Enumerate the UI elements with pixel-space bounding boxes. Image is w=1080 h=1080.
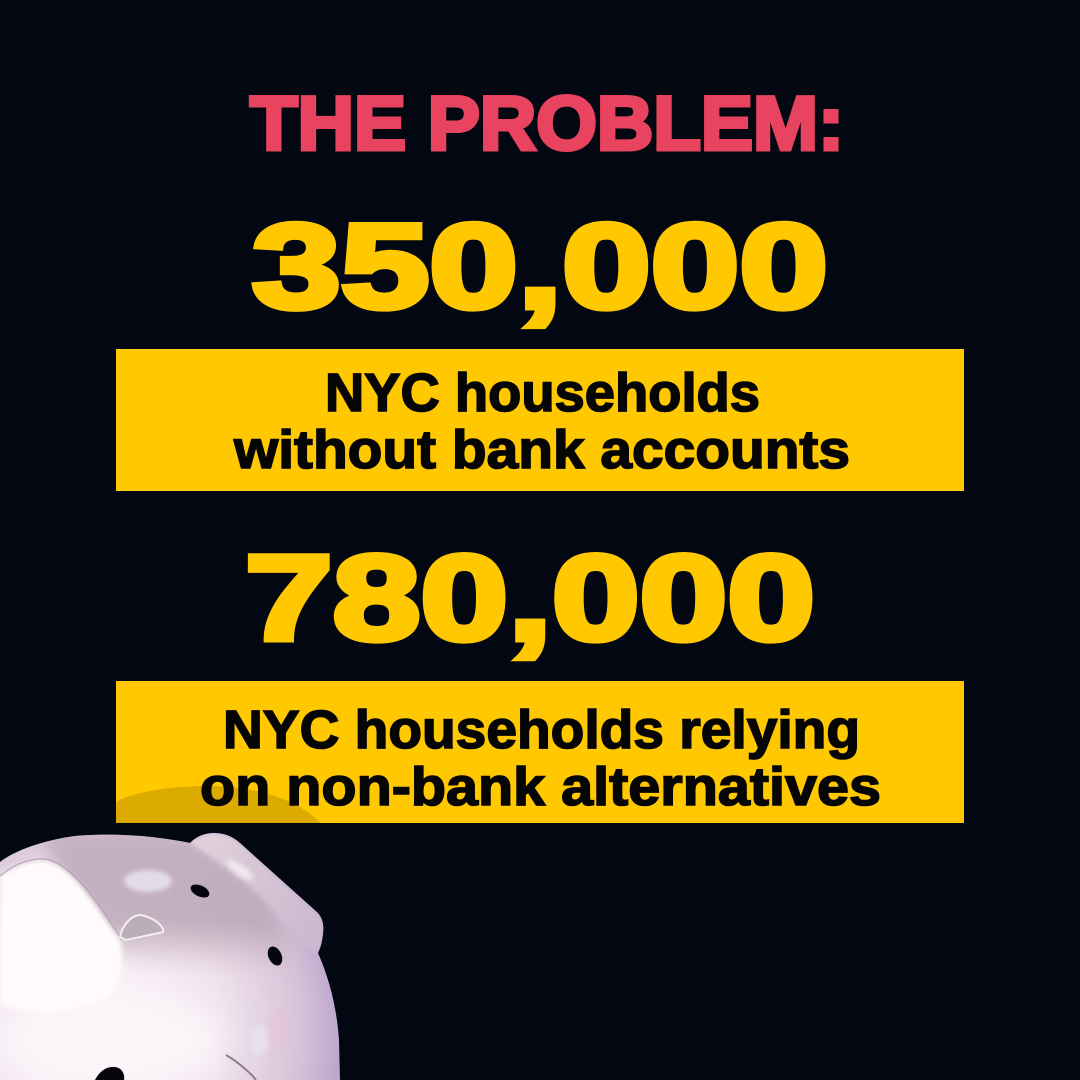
panel: households relying on non-bank alternatives: on non-bank alternatives <box>200 757 881 817</box>
statistic: 780,000: 780,000 <box>245 530 815 666</box>
icon: piggy bank photo <box>0 830 345 1080</box>
panel: households relying on non-bank alternatives <box>116 681 964 823</box>
panel: households without bank accounts: without bank accounts <box>233 420 850 480</box>
panel: households without bank accounts: NYC households <box>325 363 760 423</box>
panel: households relying on non-bank alternatives: NYC households relying <box>223 700 860 760</box>
title: THE PROBLEM: <box>250 82 844 166</box>
statistic: 350,000: 350,000 <box>252 200 828 334</box>
panel: households without bank accounts <box>116 349 964 491</box>
